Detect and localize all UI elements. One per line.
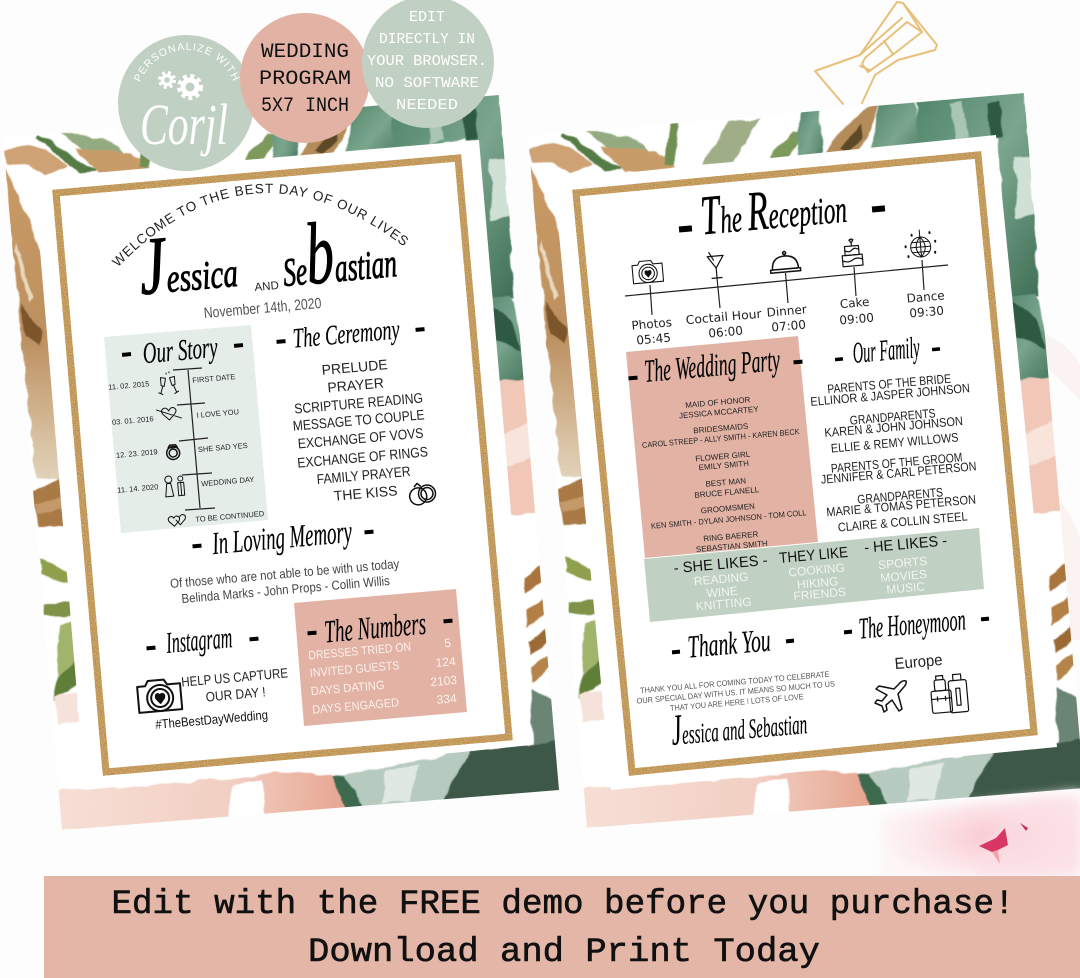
- family list: [810, 372, 977, 535]
- badge: wedding program size: WEDDING: [261, 41, 349, 64]
- numbers values: 124: [435, 654, 457, 670]
- numbers values: 334: [436, 691, 458, 707]
- heading: the wedding party: [628, 341, 803, 389]
- wedding party names: RING BAERER: [703, 530, 759, 543]
- thank you message: [636, 670, 835, 713]
- icon: wedding cake: [841, 238, 863, 267]
- wedding party names: BEST MAN: [705, 476, 747, 489]
- ceremony order list: PRELUDE: [321, 356, 388, 378]
- timeline dates: [108, 379, 159, 495]
- badge: personalize with corjl: Corjl: [140, 92, 228, 157]
- timeline labels: I LOVE YOU: [196, 407, 239, 420]
- icon: two hearts: [168, 514, 186, 527]
- arched welcome heading: WELCOME TO THE BEST DAY OF OUR LIVES: [111, 184, 408, 266]
- timeline labels: 09:30: [909, 304, 944, 320]
- they like: HIKING: [796, 574, 839, 592]
- timeline dates: 11. 02. 2015: [108, 379, 150, 392]
- memorial text: Of those who are not able to be with us today: [169, 556, 400, 591]
- instagram call to action: OUR DAY !: [205, 684, 266, 705]
- memorial text: [169, 556, 400, 606]
- bottom call to action banner: Download and Print Today: [308, 934, 820, 972]
- heading: our family: [835, 331, 940, 370]
- heading: the honeymoon: The Honeymoon: [857, 603, 967, 646]
- they like: [778, 544, 849, 603]
- heading: our story: Our Story: [141, 331, 219, 370]
- badge: edit in browser: [362, 0, 494, 128]
- numbers labels: [308, 640, 412, 717]
- icon: bride and groom: [164, 475, 185, 497]
- ceremony order list: SCRIPTURE READING: [294, 389, 424, 417]
- numbers values: 2103: [430, 673, 458, 689]
- badge: edit in browser: YOUR BROWSER.: [367, 53, 487, 70]
- icon: camera: [137, 678, 182, 713]
- he likes: - HE LIKES -: [864, 532, 948, 557]
- timeline labels: FIRST DATE: [192, 372, 236, 385]
- timeline dates: 11. 14. 2020: [117, 482, 159, 495]
- icon: martini glass: [707, 251, 725, 279]
- instagram call to action: [155, 665, 289, 732]
- gold glitter border: [576, 155, 1034, 772]
- she likes: READING: [693, 570, 749, 588]
- wedding party names: [642, 395, 807, 554]
- numbers labels: DAYS DATING: [310, 678, 385, 698]
- icon: luggage: [930, 673, 969, 714]
- numbers labels: DRESSES TRIED ON: [308, 640, 412, 662]
- peony flower photo: [880, 790, 1080, 876]
- numbers labels: DAYS ENGAGED: [312, 695, 400, 717]
- pale ribbon background shape: [1040, 330, 1080, 640]
- badge: edit in browser: NO SOFTWARE: [375, 75, 479, 92]
- timeline labels: 06:00: [708, 324, 743, 340]
- heading: our story: [122, 331, 243, 370]
- timeline labels: [631, 288, 945, 347]
- icon: cloche: [769, 250, 801, 273]
- icon: heart with arrow: [157, 407, 181, 421]
- family list: ELLINOR & JASPER JOHNSON: [810, 381, 970, 409]
- timeline labels: 07:00: [771, 318, 806, 334]
- thank you message: OUR SPECIAL DAY WITH US. IT MEANS SO MUCH TO US: [636, 679, 835, 706]
- couple names: Jessica: [135, 213, 240, 312]
- card backing with florals: [528, 86, 1080, 830]
- heading: in loving memory: In Loving Memory: [210, 513, 354, 561]
- panel: the wedding party: [626, 336, 818, 558]
- panel: left program card: [4, 95, 559, 830]
- timeline labels: 09:00: [839, 311, 874, 327]
- ceremony order list: [292, 356, 429, 504]
- she likes: WINE: [706, 584, 738, 600]
- badge: wedding program size: 5X7 INCH: [261, 95, 349, 118]
- ceremony order list: EXCHANGE OF VOVS: [297, 425, 424, 451]
- badge: personalize with corjl: [118, 35, 252, 171]
- couple names: AND: [254, 280, 279, 294]
- badge: edit in browser: NEEDED: [396, 97, 458, 114]
- ceremony order list: EXCHANGE OF RINGS: [297, 443, 429, 471]
- thank you message: THAT YOU ARE HERE ! LOTS OF LOVE: [670, 692, 804, 713]
- bottom call to action banner: [44, 876, 1080, 978]
- he likes: [864, 532, 948, 597]
- wedding party names: BRIDESMAIDS: [693, 422, 749, 435]
- he likes: SPORTS: [878, 554, 928, 572]
- family list: ELLIE & REMY WILLOWS: [830, 430, 959, 456]
- icon: gold paper clip: [815, 2, 937, 104]
- heading: the reception: The Reception: [698, 173, 849, 247]
- timeline labels: TO BE CONTINUED: [195, 509, 265, 524]
- white inner card: [554, 135, 1057, 790]
- wedding date: November 14th, 2020: [203, 295, 322, 322]
- timeline labels: Dance: [906, 288, 945, 306]
- wedding party names: GROOMSMEN: [700, 502, 755, 515]
- timeline labels: WEDDING DAY: [201, 475, 255, 488]
- panel: our story: [104, 325, 268, 533]
- wedding party names: BRUCE FLANELL: [694, 485, 760, 500]
- memorial text: Belinda Marks - John Props - Collin Willis: [181, 573, 391, 606]
- thank you message: THANK YOU ALL FOR COMING TODAY TO CELEBRATE: [640, 670, 830, 695]
- bottom call to action banner: Edit with the FREE demo before you purchase!: [112, 886, 1014, 924]
- family list: KAREN & JOHN JOHNSON: [824, 414, 963, 440]
- he likes: MUSIC: [886, 579, 926, 597]
- badge: edit in browser: DIRECTLY IN: [379, 31, 475, 48]
- wedding party names: EMILY SMITH: [698, 459, 749, 472]
- wedding party names: SEBASTIAN SMITH: [696, 539, 768, 554]
- heading: the wedding party: The Wedding Party: [643, 341, 782, 389]
- heading: instagram: [146, 621, 259, 660]
- numbers labels: INVITED GUESTS: [309, 658, 400, 680]
- numbers values: 5: [444, 636, 452, 650]
- icon: diamond ring: [166, 444, 180, 460]
- icon: disco ball: [904, 229, 936, 258]
- he likes: MOVIES: [880, 567, 928, 585]
- heading: thank you: Thank You: [686, 621, 772, 665]
- signature: Jessica and Sebastian: [669, 694, 809, 755]
- heading: the numbers: The Numbers: [323, 605, 427, 649]
- heading: the ceremony: The Ceremony: [292, 314, 401, 355]
- wedding party names: CAROL STREEP - ALLY SMITH - KAREN BECK: [642, 427, 800, 450]
- icon: camera: [632, 260, 664, 284]
- family list: MARIE & TOMAS PETERSON: [826, 493, 976, 520]
- icon: gears: [160, 72, 201, 98]
- panel: right program card: [528, 86, 1080, 830]
- ceremony order list: FAMILY PRAYER: [316, 463, 411, 487]
- timeline labels: Dinner: [766, 302, 807, 320]
- she likes: - SHE LIKES -: [673, 552, 768, 577]
- she likes: KNITTING: [695, 595, 752, 613]
- timeline labels: Cake: [839, 295, 870, 311]
- family list: JENNIFER & CARL PETERSON: [820, 459, 977, 487]
- ceremony order list: PRAYER: [327, 375, 384, 395]
- they like: FRIENDS: [793, 585, 846, 603]
- badge: edit in browser: EDIT: [409, 9, 445, 26]
- wedding party names: FLOWER GIRL: [695, 450, 751, 463]
- badge: wedding program size: PROGRAM: [259, 68, 351, 91]
- instagram call to action: #TheBestDayWedding: [155, 707, 269, 732]
- wedding party names: MAID OF HONOR: [685, 395, 751, 410]
- family list: PARENTS OF THE BRIDE: [827, 372, 952, 396]
- timeline dates: 03. 01. 2016: [112, 414, 154, 427]
- heading: the honeymoon: [844, 603, 989, 646]
- ceremony order list: THE KISS: [333, 482, 398, 504]
- ceremony order list: MESSAGE TO COUPLE: [292, 406, 425, 434]
- numbers values: [430, 636, 458, 707]
- timeline labels: SHE SAD YES: [198, 441, 248, 454]
- white inner card: [34, 140, 531, 790]
- timeline labels: Coctail Hour: [685, 307, 762, 327]
- heading: in loving memory: [192, 513, 374, 561]
- she likes: [673, 552, 768, 613]
- couple names: [135, 199, 400, 312]
- card backing with florals: [3, 88, 562, 832]
- family list: GRANDPARENTS: [849, 406, 936, 428]
- icon: champagne glasses: [157, 371, 179, 395]
- heading: our family: Our Family: [851, 331, 921, 370]
- they like: COOKING: [788, 561, 845, 579]
- gold glitter border: [56, 158, 509, 772]
- panel: likes: [644, 528, 984, 622]
- wedding party names: JESSICA MCCARTEY: [679, 404, 760, 420]
- instagram call to action: HELP US CAPTURE: [181, 665, 289, 690]
- icon: wedding rings: [409, 482, 436, 506]
- heading: thank you: [672, 621, 794, 665]
- heading: the ceremony: [276, 314, 425, 355]
- family list: PARENTS OF THE GROOM: [830, 450, 963, 476]
- heading: the numbers: [307, 605, 453, 649]
- wedding party names: KEN SMITH - DYLAN JOHNSON - TOM COLL: [651, 508, 807, 531]
- family list: GRANDPARENTS: [857, 485, 944, 507]
- badge: wedding program size: [240, 13, 370, 143]
- timeline labels: [192, 372, 265, 524]
- reception timeline: [625, 260, 948, 315]
- heading: instagram: Instagram: [164, 621, 233, 660]
- panel: the numbers: [294, 589, 467, 726]
- timeline dates: 12. 23. 2019: [116, 447, 158, 460]
- they like: THEY LIKE: [778, 544, 849, 567]
- icon: airplane: [875, 681, 906, 712]
- family list: CLAIRE & COLLIN STEEL: [837, 509, 968, 535]
- badge: personalize with corjl: PERSONALIZE WITH: [134, 42, 240, 82]
- timeline lines: [173, 368, 215, 510]
- honeymoon destination: Europe: [894, 652, 943, 673]
- timeline labels: 05:45: [636, 331, 671, 347]
- couple names: Sebastian: [278, 199, 400, 306]
- timeline labels: Photos: [631, 315, 672, 333]
